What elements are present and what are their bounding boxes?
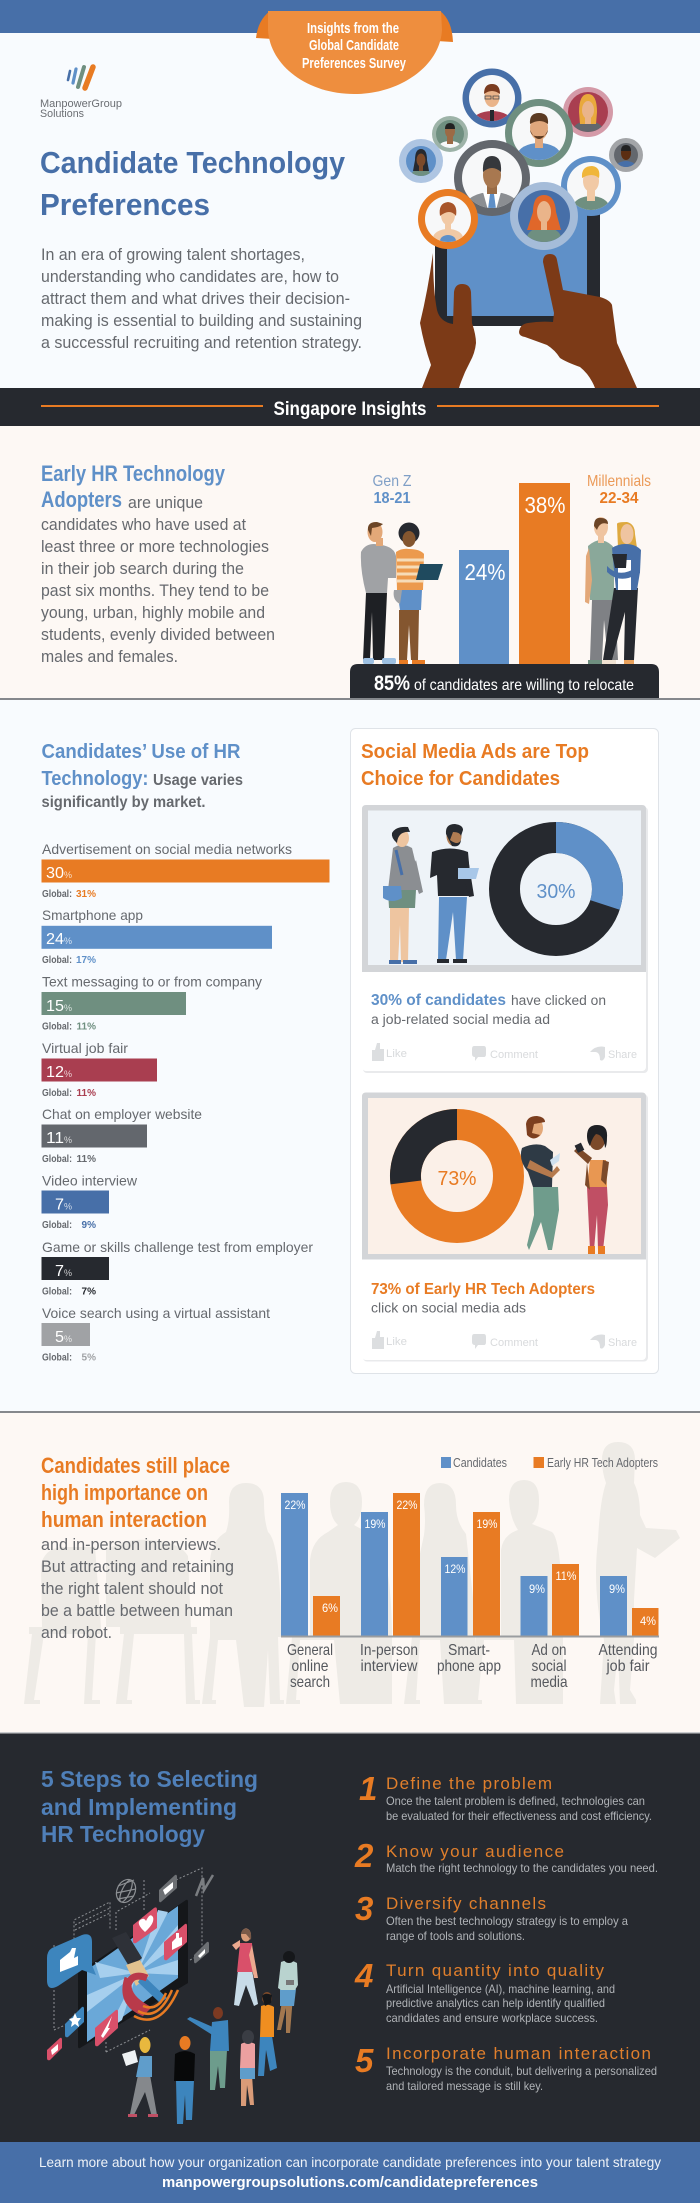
- donut chart 30%: 30%: [536, 881, 576, 903]
- donut chart 30%: [504, 822, 623, 940]
- bar: smartphone app: 17%: [76, 955, 96, 966]
- handshake and magnet: [112, 1932, 142, 1968]
- bar: social media: 30: [46, 865, 64, 882]
- intro paragraph: a successful recruiting and retention strategy.: [41, 333, 362, 352]
- bar: text messaging: 11%: [77, 1022, 96, 1032]
- bar: video interview: [42, 1172, 138, 1231]
- early adopter text: least three or more technologies: [41, 537, 269, 556]
- social actions: Share: [608, 1337, 637, 1349]
- intro paragraph: making is essential to building and sustaining: [41, 311, 362, 330]
- panel: candidates' use of HR technology: [42, 741, 330, 1364]
- panel: 5 steps: [0, 1732, 700, 2142]
- bar: chat: Chat on employer website: [42, 1106, 202, 1122]
- legend: Candidates: [453, 1455, 507, 1470]
- caption: a job-related social media ad: [371, 1012, 550, 1027]
- hands: [420, 253, 637, 388]
- title: Preferences: [40, 187, 210, 222]
- globe icon: [113, 1876, 139, 1906]
- grouped bar chart: 9%: [529, 1582, 545, 1596]
- step 4: predictive analytics can help identify qualified: [386, 1996, 605, 2010]
- people: Gen Z: [361, 522, 443, 664]
- heading: HR Technology: [41, 1821, 205, 1847]
- step 5: and tailored message is still key.: [386, 2079, 543, 2093]
- heading: significantly by market.: [42, 794, 206, 811]
- caption: [371, 1281, 595, 1316]
- top blue bar: [0, 0, 700, 33]
- bar: virtual job fair: %: [64, 1069, 72, 1079]
- card: 30 percent: [362, 805, 648, 1073]
- section heading band: Singapore Insights: Singapore Insights: [274, 399, 426, 420]
- section heading band: Singapore Insights: [0, 388, 700, 426]
- people: [521, 1116, 609, 1254]
- grouped bar chart: Attending: [598, 1642, 658, 1659]
- bar: game or skills challenge: 7%: [82, 1286, 96, 1298]
- legend: Early HR Tech Adopters: [547, 1455, 658, 1470]
- tablet: [435, 205, 600, 326]
- grouped bar chart: job fair: [606, 1658, 650, 1675]
- social actions: [372, 1043, 637, 1061]
- bar: virtual job fair: 12: [46, 1064, 64, 1081]
- card: 73 percent: [362, 1092, 648, 1362]
- people group: [122, 1928, 298, 2124]
- avatars: [399, 68, 643, 250]
- caption: have clicked on: [511, 993, 606, 1008]
- grouped bar chart: [281, 1493, 659, 1691]
- survey badge: [256, 11, 453, 94]
- grouped bar chart: 22%: [284, 1498, 306, 1512]
- bar: voice search: 5%: [82, 1352, 96, 1364]
- early adopter text: Early HR Technology: [41, 461, 226, 486]
- heading: [41, 1766, 258, 1847]
- heading and text: But attracting and retaining: [41, 1557, 234, 1576]
- heading: 5 Steps to Selecting: [41, 1766, 258, 1792]
- grouped bar chart: online: [292, 1658, 329, 1675]
- panel: header: [0, 0, 700, 388]
- heading: [42, 741, 243, 811]
- early adopter text: past six months. They tend to be: [41, 581, 269, 600]
- social actions: Share: [608, 1049, 637, 1061]
- early adopter text: [41, 461, 275, 666]
- early adopter text: Adopters: [41, 487, 122, 512]
- logo: ManpowerGroup: [40, 98, 122, 110]
- social actions: Like: [386, 1048, 407, 1060]
- step 5: 5: [355, 2042, 374, 2079]
- intro paragraph: In an era of growing talent shortages,: [41, 245, 305, 264]
- step 1: [359, 1770, 652, 1823]
- heading: Technology:: [42, 768, 148, 790]
- legend: [441, 1455, 658, 1470]
- heading and text: be a battle between human: [41, 1601, 233, 1620]
- bar: text messaging: 15: [46, 998, 64, 1015]
- step 3: Often the best technology strategy is to employ a: [386, 1914, 628, 1928]
- caption: 30% of candidates: [371, 992, 506, 1009]
- age group chart: [372, 473, 651, 664]
- heading: Usage varies: [153, 772, 243, 789]
- bar: smartphone app: %: [64, 936, 72, 946]
- grouped bar chart: media: [530, 1674, 568, 1691]
- social actions: Comment: [490, 1049, 538, 1061]
- people: [383, 824, 479, 964]
- bar: chat: %: [64, 1135, 72, 1145]
- bar: social media: %: [64, 870, 72, 880]
- bar: chat: 11%: [77, 1154, 96, 1165]
- man pointing: [187, 2007, 229, 2090]
- caption: [371, 992, 606, 1027]
- bar: voice search: 5: [55, 1329, 64, 1346]
- heading: [361, 741, 589, 790]
- heading: and Implementing: [41, 1794, 237, 1820]
- bar: chat: [42, 1106, 202, 1165]
- bar: game or skills challenge: [42, 1239, 313, 1298]
- age group chart: 24%: [464, 559, 506, 585]
- step 1: be evaluated for their effectiveness and cost efficiency.: [386, 1809, 652, 1823]
- relocation callout: [350, 664, 659, 699]
- bar: game or skills challenge: 7: [55, 1263, 64, 1280]
- bar: game or skills challenge: Global:: [42, 1286, 72, 1298]
- step 5: Technology is the conduit, but delivering a personalized: [386, 2064, 657, 2078]
- early adopter text: students, evenly divided between: [41, 625, 275, 644]
- heading and text: and in-person interviews.: [41, 1535, 221, 1554]
- grouped bar chart: 9%: [609, 1582, 625, 1596]
- age group chart: Gen Z: [372, 473, 412, 490]
- heading: Social Media Ads are Top: [361, 741, 589, 763]
- bar: social media: [42, 841, 330, 900]
- bar: voice search: Voice search using a virtual assistant: [42, 1305, 270, 1321]
- intro paragraph: attract them and what drives their decision-: [41, 289, 350, 308]
- man with camera: [277, 1951, 298, 2033]
- step 3: Diversify channels: [386, 1894, 546, 1913]
- bar: chat: 11: [46, 1130, 64, 1147]
- bar: game or skills challenge: Game or skills challenge test from employer: [42, 1239, 313, 1255]
- bar: virtual job fair: 11%: [77, 1088, 96, 1099]
- dotted connectors: [54, 1868, 202, 2052]
- age group chart: 22-34: [600, 490, 639, 507]
- woman with laptop: [122, 2037, 158, 2117]
- grouped bar chart: 11%: [556, 1569, 577, 1583]
- relocation callout: 85%: [374, 672, 410, 695]
- step 3: 3: [355, 1890, 373, 1927]
- icon bubbles: [47, 1934, 96, 1988]
- grouped bar chart: interview: [360, 1658, 418, 1675]
- early adopter text: candidates who have used at: [41, 515, 246, 534]
- step 4: candidates and ensure workplace success.: [386, 2011, 598, 2025]
- intro paragraph: understanding who candidates are, how to: [41, 267, 339, 286]
- heading and text: [41, 1453, 234, 1642]
- bar: smartphone app: Global:: [42, 955, 72, 966]
- panel: human interaction: [0, 1411, 700, 1732]
- age group chart: 38%: [524, 492, 566, 518]
- step 3: [355, 1890, 628, 1943]
- bar: voice search: [42, 1305, 270, 1364]
- step 4: Turn quantity into quality: [386, 1961, 604, 1980]
- bar: virtual job fair: Global:: [42, 1088, 72, 1099]
- intro paragraph: [41, 245, 362, 352]
- chart line icon: [196, 1875, 213, 1896]
- logo: Solutions: [40, 108, 84, 120]
- woman in pink: [240, 2030, 255, 2106]
- bar: smartphone app: 24: [46, 931, 64, 948]
- illustration: technology tablet and people: [47, 1868, 298, 2124]
- survey badge: Global Candidate: [309, 37, 399, 54]
- title: Candidate Technology: [40, 145, 346, 180]
- step 5: [355, 2042, 657, 2093]
- social actions: Like: [386, 1336, 407, 1348]
- silhouettes background: [24, 1442, 680, 1707]
- age group chart: 18-21: [374, 490, 411, 507]
- heading and text: human interaction: [41, 1507, 207, 1532]
- donut chart 73%: 73%: [438, 1168, 477, 1190]
- step 2: Know your audience: [386, 1842, 564, 1861]
- grouped bar chart: 19%: [364, 1517, 386, 1531]
- donut chart 73%: [390, 1109, 508, 1228]
- title: [40, 145, 346, 222]
- footer: [0, 2142, 700, 2203]
- bar: social media: 31%: [76, 889, 96, 900]
- step 3: range of tools and solutions.: [386, 1929, 525, 1943]
- bar: text messaging: [42, 974, 262, 1032]
- step 1: Define the problem: [386, 1774, 552, 1793]
- bar: video interview: Global:: [42, 1220, 72, 1231]
- step 4: Artificial Intelligence (AI), machine learning, and: [386, 1982, 615, 1996]
- step 4: [354, 1957, 615, 2025]
- bar: text messaging: %: [64, 1003, 72, 1013]
- grouped bar chart: Smart-: [448, 1642, 490, 1659]
- early adopter text: young, urban, highly mobile and: [41, 603, 265, 622]
- tablet: [78, 1900, 188, 2048]
- survey badge: Insights from the: [307, 20, 399, 37]
- bar: voice search: Global:: [42, 1352, 72, 1364]
- social actions: Comment: [490, 1337, 538, 1349]
- age group chart: Millennials: [587, 473, 651, 490]
- grouped bar chart: phone app: [437, 1658, 501, 1675]
- step 2: Match the right technology to the candidates you need.: [386, 1861, 658, 1875]
- illustration: tablet with candidate avatars: [399, 68, 643, 388]
- relocation callout: of candidates are willing to relocate: [414, 677, 634, 694]
- step 4: 4: [354, 1957, 373, 1994]
- bar: smartphone app: [42, 907, 272, 966]
- step 2: 2: [354, 1837, 374, 1874]
- grouped bar chart: 12%: [444, 1562, 466, 1576]
- heading and text: the right talent should not: [41, 1579, 223, 1598]
- grouped bar chart: 6%: [322, 1601, 338, 1615]
- step 5: Incorporate human interaction: [386, 2044, 651, 2063]
- bar: virtual job fair: [42, 1040, 157, 1099]
- panel: early adopters: [0, 426, 700, 699]
- footer: manpowergroupsolutions.com/candidatepreferences: [162, 2174, 538, 2191]
- bar: game or skills challenge: %: [64, 1268, 72, 1278]
- heading and text: Candidates still place: [41, 1453, 230, 1478]
- heading and text: high importance on: [41, 1480, 208, 1505]
- heading and text: and robot.: [41, 1623, 112, 1642]
- grouped bar chart: search: [290, 1674, 330, 1691]
- heading: Candidates’ Use of HR: [42, 741, 241, 763]
- bar: video interview: 9%: [82, 1220, 96, 1231]
- step 1: Once the talent problem is defined, technologies can: [386, 1794, 645, 1808]
- bar: text messaging: Text messaging to or from company: [42, 974, 262, 990]
- step 1: 1: [359, 1770, 377, 1807]
- footer: Learn more about how your organization can incorporate candidate preferences into your talent strategy: [39, 2154, 661, 2170]
- early adopter text: males and females.: [41, 647, 178, 666]
- logo: [40, 67, 122, 120]
- man in orange: [258, 1992, 277, 2076]
- bar: video interview: Video interview: [42, 1172, 138, 1188]
- bar: smartphone app: Smartphone app: [42, 907, 143, 923]
- man in black sweater: [174, 2036, 195, 2124]
- grouped bar chart: social: [532, 1658, 566, 1675]
- bar: social media: Global:: [42, 889, 72, 900]
- bar: text messaging: Global:: [42, 1022, 72, 1032]
- survey badge: Preferences Survey: [302, 55, 406, 72]
- people: Millennials: [585, 517, 641, 664]
- grouped bar chart: Ad on: [532, 1642, 566, 1659]
- panel: social media ads: [350, 728, 658, 1374]
- woman with phone: [232, 1928, 258, 2006]
- caption: click on social media ads: [371, 1300, 526, 1316]
- bar: social media: Advertisement on social media networks: [42, 841, 292, 857]
- bar: video interview: %: [64, 1202, 72, 1212]
- social actions: [372, 1331, 637, 1349]
- bar: video interview: 7: [55, 1196, 64, 1214]
- grouped bar chart: General: [287, 1642, 333, 1659]
- step 2: [354, 1837, 658, 1875]
- grouped bar chart: 19%: [476, 1517, 498, 1531]
- bar: chat: Global:: [42, 1154, 72, 1165]
- grouped bar chart: In-person: [360, 1642, 418, 1659]
- grouped bar chart: 4%: [640, 1614, 656, 1628]
- heading: Choice for Candidates: [361, 768, 560, 790]
- early adopter text: are unique: [128, 493, 203, 512]
- bar: virtual job fair: Virtual job fair: [42, 1040, 128, 1056]
- bar: voice search: %: [64, 1334, 72, 1344]
- early adopter text: in their job search during the: [41, 559, 244, 578]
- caption: 73% of Early HR Tech Adopters: [371, 1281, 595, 1298]
- grouped bar chart: 22%: [396, 1498, 418, 1512]
